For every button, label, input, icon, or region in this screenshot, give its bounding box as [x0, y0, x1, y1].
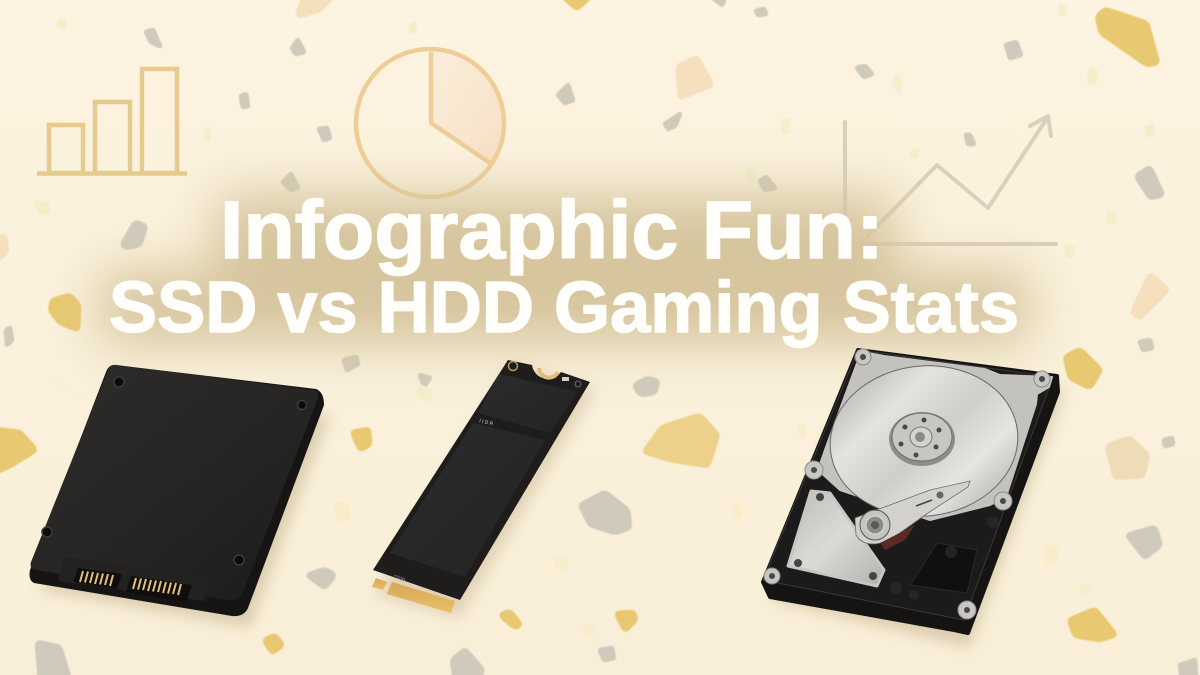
title	[109, 185, 1019, 348]
title backdrop glow	[100, 194, 1030, 344]
image: M.2 NVMe SSD: TT0B	[392, 574, 406, 584]
icon: pie chart	[356, 49, 504, 197]
actuator arm	[855, 481, 970, 550]
control chip	[910, 543, 977, 593]
corner screws	[764, 349, 1050, 619]
icon: line chart with arrow	[845, 116, 1056, 244]
casing	[763, 350, 1058, 633]
image: 2.5 inch SATA SSD	[30, 365, 330, 628]
title: SSD vs HDD Gaming Stats	[109, 268, 1019, 348]
silver top plate	[818, 351, 1052, 520]
image: hard disk drive	[763, 349, 1065, 648]
SATA connector	[58, 557, 208, 602]
platter	[823, 357, 1025, 525]
magnet cover plate	[788, 491, 884, 586]
image: M.2 NVMe SSD	[372, 360, 595, 618]
screws	[42, 377, 306, 565]
title: Infographic Fun:	[220, 185, 884, 276]
hub	[889, 412, 955, 466]
image: M.2 NVMe SSD: I I D R	[479, 418, 494, 427]
icon: bar chart	[37, 69, 187, 174]
